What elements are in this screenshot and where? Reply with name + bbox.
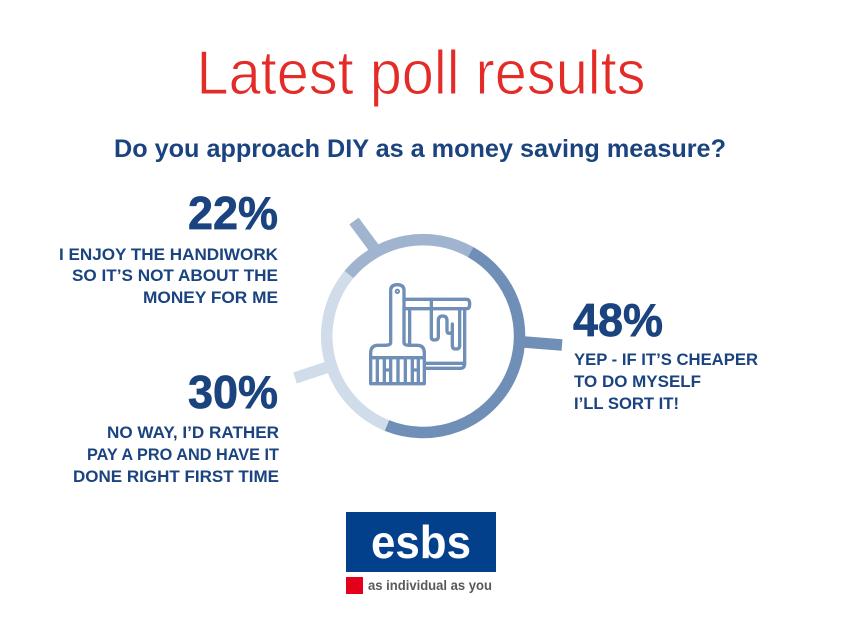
result: 48 percent: I’LL SORT IT! bbox=[574, 395, 679, 413]
icon: paint brush and bucket bbox=[371, 285, 470, 384]
result: 30 percent: DONE RIGHT FIRST TIME bbox=[73, 468, 279, 486]
logo box bbox=[346, 512, 496, 572]
result: 48 percent: 48% bbox=[573, 294, 663, 346]
result: 22 percent bbox=[59, 187, 278, 307]
segment: 22 percent bbox=[349, 221, 470, 274]
result: 22 percent: SO IT’S NOT ABOUT THE bbox=[72, 267, 278, 285]
segment: 48 percent bbox=[387, 252, 562, 433]
icon: bucket bbox=[404, 299, 470, 368]
tagline: as individual as you bbox=[368, 577, 492, 593]
result: 30 percent: NO WAY, I’D RATHER bbox=[107, 424, 279, 442]
red square bbox=[346, 577, 363, 594]
result: 22 percent: I ENJOY THE HANDIWORK bbox=[59, 246, 278, 264]
result: 22 percent: 22% bbox=[188, 187, 278, 239]
result: 30 percent: PAY A PRO AND HAVE IT bbox=[87, 446, 279, 464]
subtitle question: Do you approach DIY as a money saving measure? bbox=[114, 135, 726, 163]
logo wordmark: esbs bbox=[371, 516, 471, 568]
donut chart bbox=[295, 221, 562, 433]
result: 48 percent: TO DO MYSELF bbox=[574, 373, 701, 391]
result: 48 percent: YEP - IF IT’S CHEAPER bbox=[574, 351, 758, 369]
result: 30 percent: 30% bbox=[188, 366, 278, 418]
result: 30 percent bbox=[73, 366, 279, 486]
icon: brush bbox=[371, 285, 424, 384]
result: 22 percent: MONEY FOR ME bbox=[143, 289, 278, 307]
segment: 30 percent bbox=[295, 274, 387, 426]
title: Latest poll results bbox=[196, 39, 646, 108]
logo: esbs bbox=[346, 512, 496, 594]
result: 48 percent bbox=[573, 294, 758, 413]
